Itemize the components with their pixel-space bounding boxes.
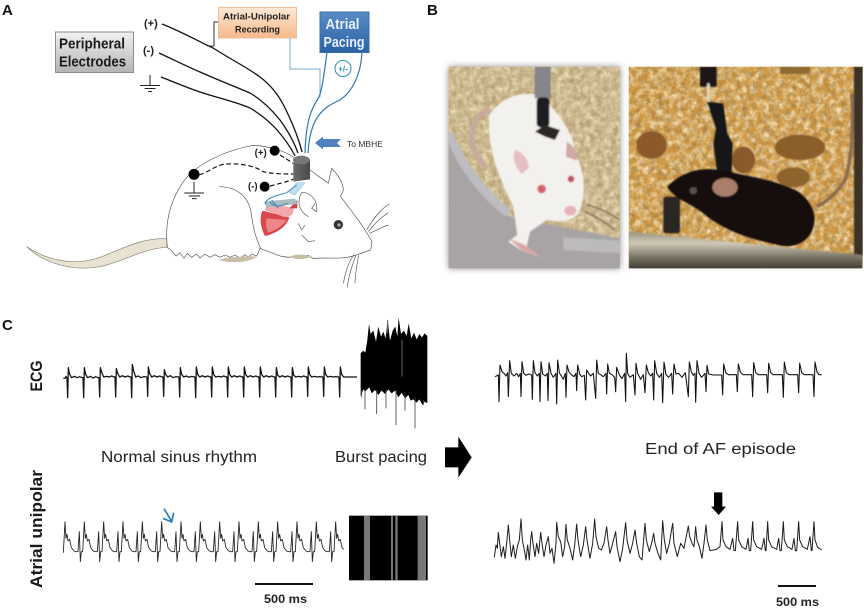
burst pacing block: [349, 516, 428, 580]
text: normal sinus rhythm: Normal sinus rhythm: [101, 449, 257, 466]
panel C label: C: [2, 317, 13, 334]
large transition arrow: [445, 437, 472, 478]
eye: [334, 220, 343, 229]
whiskers: [343, 204, 389, 287]
heart with atrial electrode: [261, 183, 305, 236]
text: burst pacing: Burst pacing: [335, 449, 427, 466]
panel A label: A: [2, 2, 13, 19]
wire labels: (+): [144, 18, 158, 30]
ECG trace: sinus rhythm then burst: [63, 317, 427, 428]
to MBHE arrow: [315, 136, 383, 150]
end of AF marker arrow: [711, 492, 726, 515]
pacing wires: [305, 52, 362, 153]
pacing polarity symbol: [335, 60, 351, 76]
panel A: rat instrumentation diagram: [27, 8, 389, 287]
atrial-unipolar recording box: [207, 8, 296, 46]
wire labels: (-): [143, 45, 154, 57]
atrial pacing box: Pacing: [324, 34, 364, 51]
implanted electrode sites: (-): [248, 182, 258, 193]
feet: [218, 256, 257, 262]
peripheral electrodes box: [56, 32, 134, 72]
to MBHE arrow: To MBHE: [347, 139, 383, 149]
scale bar left: 500 ms: [264, 592, 307, 606]
head connector cylinder: [293, 156, 310, 182]
thigh line: [219, 187, 261, 248]
axis label: Atrial unipolar: Atrial unipolar: [27, 470, 46, 588]
ECG trace: end of AF: [495, 353, 822, 404]
scale bar right: 500 ms: [776, 595, 819, 609]
rat outline: [27, 145, 389, 287]
text: end of AF episode: End of AF episode: [645, 441, 796, 458]
blue arrow marker: [163, 509, 174, 522]
peripheral electrode wires: [159, 24, 302, 156]
scale bar left: [255, 583, 313, 606]
atrial-unipolar recording box: Recording: [235, 24, 280, 34]
ground symbol: [140, 75, 160, 92]
atrial-unipolar recording box: Atrial-Unipolar: [223, 12, 291, 22]
wire labels: [143, 18, 158, 57]
ear: [299, 193, 317, 217]
atrial unipolar trace: end of AF: [494, 519, 822, 563]
panel B label: B: [427, 2, 438, 19]
implanted electrode sites: [184, 146, 293, 199]
axis label: ECG: ECG: [27, 360, 46, 392]
scale bar right: [776, 585, 819, 609]
body and head: [167, 145, 372, 259]
panel B: rat photo: [443, 67, 622, 273]
peripheral electrodes box: Peripheral: [59, 36, 125, 52]
implanted electrode sites: (+): [255, 148, 267, 159]
cheek marks: [298, 223, 315, 242]
atrial unipolar trace: sinus rhythm then burst: [63, 516, 428, 580]
recording wire: [290, 38, 320, 97]
panel B: mouse photo: [629, 67, 864, 270]
pacing polarity symbol: +/-: [338, 64, 348, 74]
atrial pacing box: [320, 12, 369, 52]
tail: [27, 239, 167, 268]
peripheral electrodes box: Electrodes: [59, 54, 126, 70]
atrial pacing box: Atrial: [326, 16, 360, 33]
